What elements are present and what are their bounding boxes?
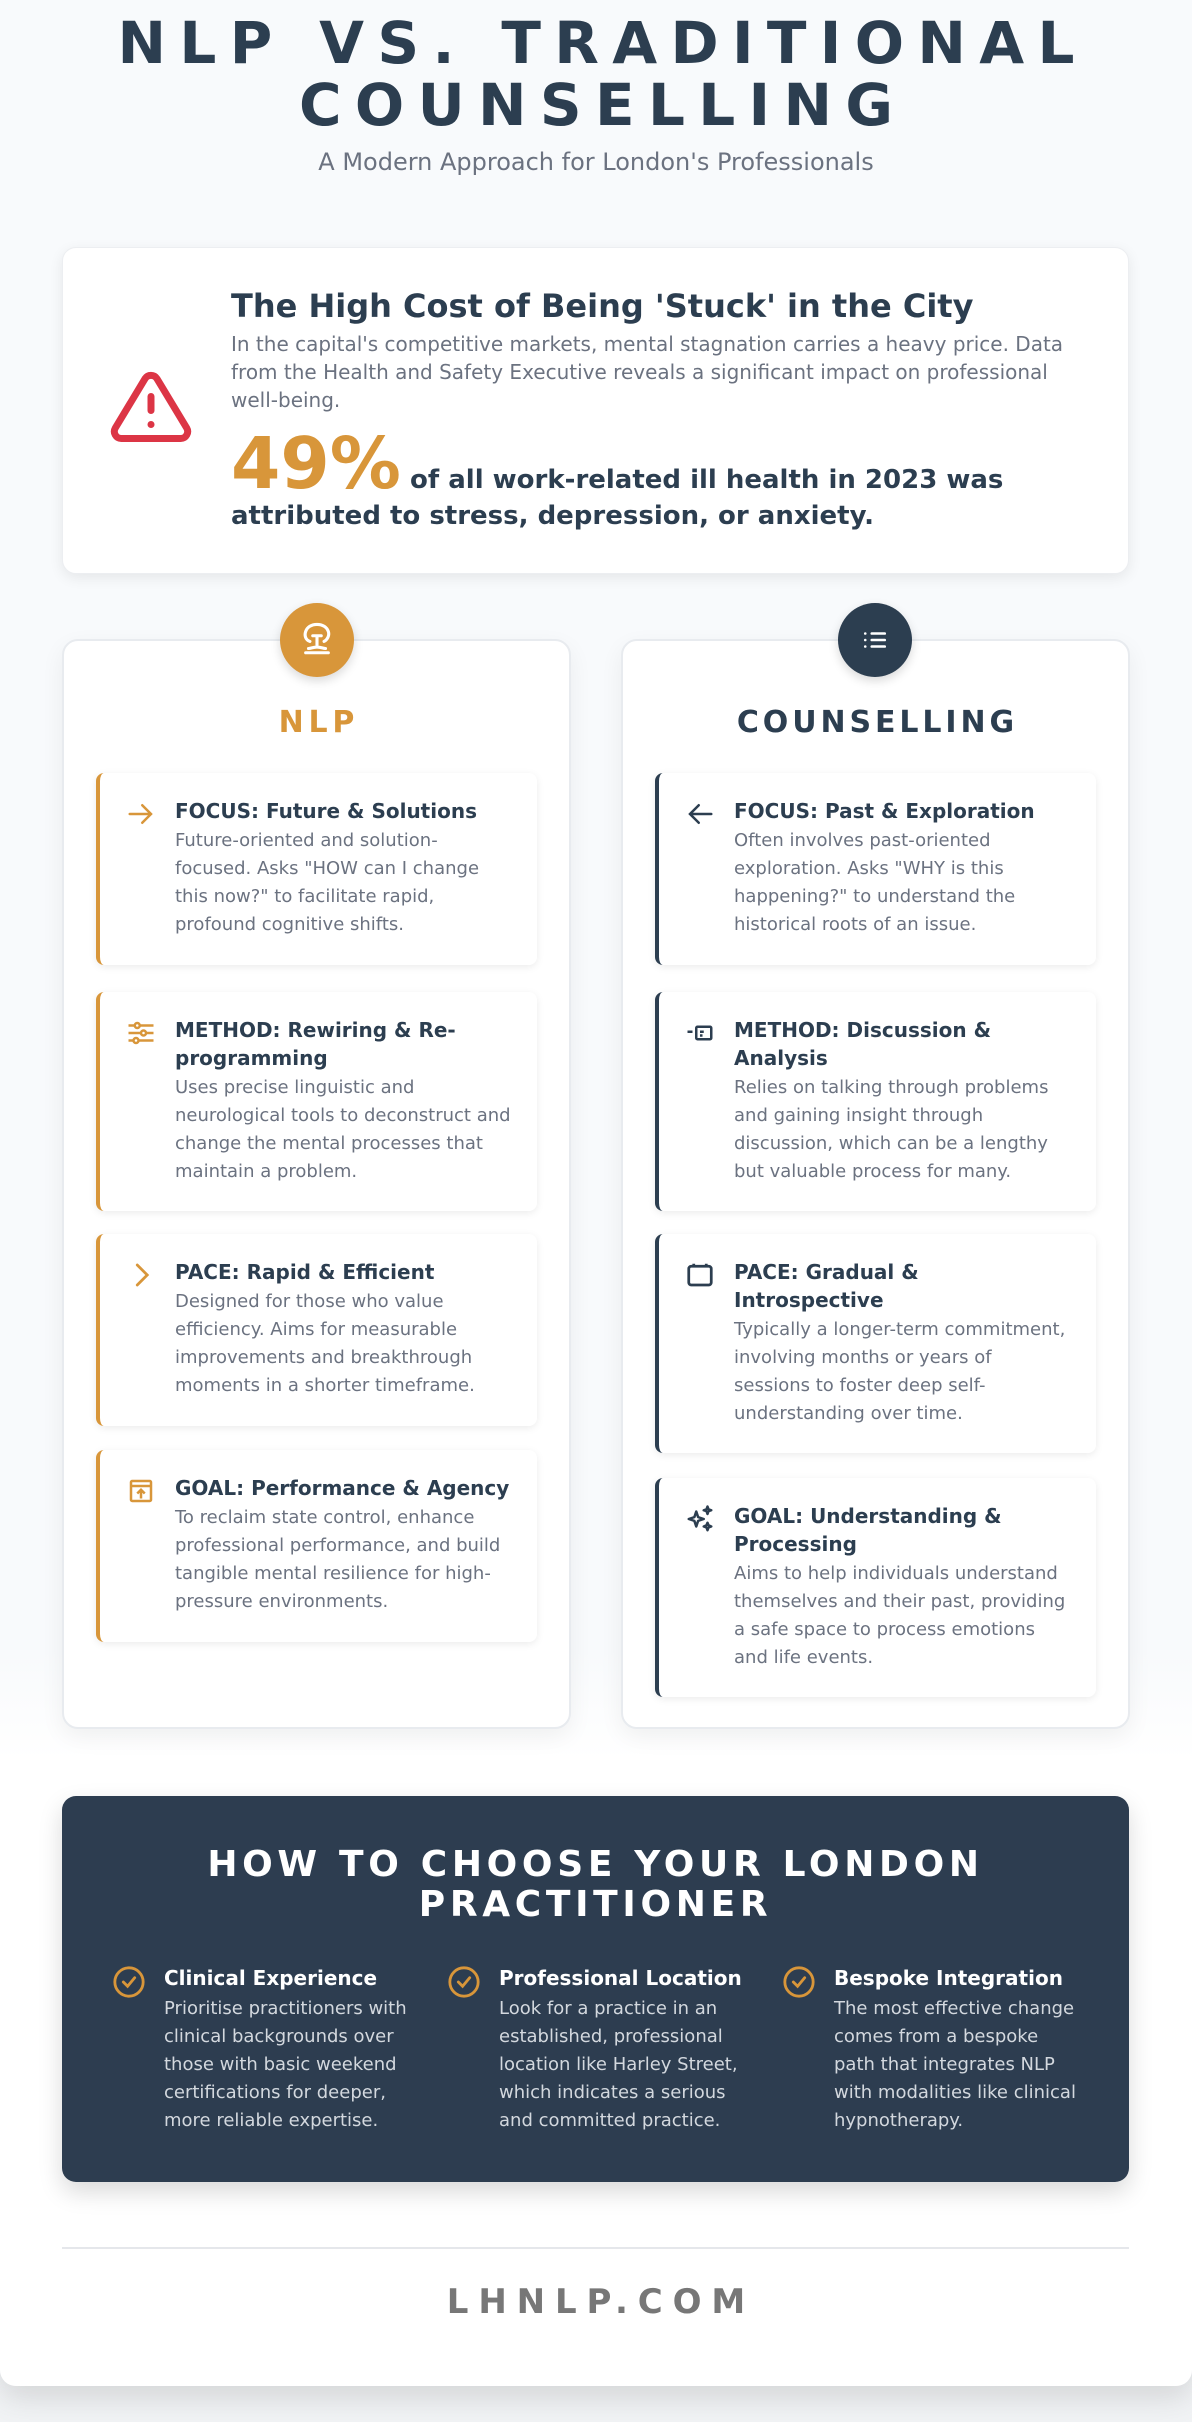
item: goal: To reclaim state control, enhance professional performance, and build tangible mental resilience for high-pressure environments. bbox=[175, 1507, 500, 1612]
panel: how to choose: The most effective change comes from a bespoke path that integrates NLP with modalities like clinical hypnotherapy. bbox=[834, 1998, 1076, 2131]
title: NLP VS. TRADITIONAL bbox=[118, 9, 1088, 77]
panel: how to choose bbox=[62, 1796, 1129, 2182]
footer: website: LHNLP.COM bbox=[447, 2282, 755, 2322]
item: method: METHOD: Discussion & Analysis bbox=[734, 1018, 991, 1070]
item: goal bbox=[96, 1450, 537, 1642]
icon: warning bbox=[110, 372, 192, 442]
title: COUNSELLING bbox=[299, 71, 906, 139]
panel: how to choose: Look for a practice in an established, professional location like Harley Street, which indicates a serious and committed practice. bbox=[499, 1998, 738, 2131]
item: method: METHOD: Rewiring & Re-programming bbox=[175, 1018, 456, 1070]
heading bbox=[207, 1844, 984, 1925]
item: focus: FOCUS: Past & Exploration bbox=[734, 799, 1035, 823]
item: method: Uses precise linguistic and neurological tools to deconstruct and change the mental processes that maintain a problem. bbox=[175, 1077, 511, 1182]
text block: In the capital's competitive markets, mental stagnation carries a heavy price. Data from the Health and Safety Executive reveals a significant impact on professional well-being. bbox=[231, 332, 1063, 412]
item: method: Relies on talking through problems and gaining insight through discussion, which can be a lengthy but valuable process for many. bbox=[734, 1077, 1048, 1182]
stat: 49% of all work-related ill health in 2023 was attributed to stress, depression, or anxiety. bbox=[231, 422, 1003, 531]
item: goal: GOAL: Performance & Agency bbox=[175, 1476, 509, 1500]
item: goal: GOAL: Understanding & Processing bbox=[734, 1504, 1002, 1556]
column title: COUNSELLING bbox=[737, 705, 1018, 740]
item: method bbox=[96, 992, 537, 1211]
tip: bespoke integration bbox=[783, 1966, 1076, 2131]
panel: NLP column bbox=[62, 639, 571, 1729]
tip: clinical experience bbox=[113, 1966, 407, 2131]
panel: Counselling column bbox=[621, 639, 1130, 1729]
heading: HOW TO CHOOSE YOUR LONDON bbox=[207, 1844, 984, 1885]
panel: stat card bbox=[62, 247, 1129, 574]
item: focus: Future-oriented and solution-focused. Asks "HOW can I change this now?" to facilitate rapid, profound cognitive shifts. bbox=[175, 830, 479, 935]
heading: PRACTITIONER bbox=[419, 1884, 772, 1925]
item: focus bbox=[655, 773, 1096, 965]
item: goal bbox=[655, 1478, 1096, 1697]
panel: how to choose: Bespoke Integration bbox=[834, 1966, 1063, 1990]
item: pace: Designed for those who value efficiency. Aims for measurable improvements and breakthrough moments in a shorter timeframe. bbox=[175, 1291, 475, 1396]
subtitle: A Modern Approach for London's Professionals bbox=[318, 148, 874, 176]
item: goal: Aims to help individuals understand themselves and their past, providing a safe space to process emotions and life events. bbox=[734, 1563, 1065, 1668]
panel: how to choose: Prioritise practitioners with clinical backgrounds over those with basic weekend certifications for deeper, more reliable expertise. bbox=[164, 1998, 407, 2131]
item: focus: FOCUS: Future & Solutions bbox=[175, 799, 477, 823]
item: focus bbox=[96, 773, 537, 965]
icon: calendar bbox=[687, 1264, 713, 1286]
panel: how to choose: Clinical Experience bbox=[164, 1966, 377, 1990]
icon: chat bbox=[688, 1026, 712, 1040]
item: pace bbox=[96, 1234, 537, 1426]
heading: The High Cost of Being 'Stuck' in the City bbox=[231, 287, 973, 325]
column title: NLP bbox=[279, 705, 359, 740]
icon: NLP circle bbox=[280, 603, 354, 677]
icon: chevron bbox=[136, 1264, 150, 1286]
icon: sparkles bbox=[688, 1505, 712, 1532]
icon: sliders bbox=[128, 1022, 154, 1044]
panel: how to choose: Professional Location bbox=[499, 1966, 742, 1990]
item: pace: Typically a longer-term commitment, involving months or years of sessions to foster deep self-understanding over time. bbox=[734, 1319, 1065, 1424]
item: pace: PACE: Gradual & Introspective bbox=[734, 1260, 919, 1312]
item: pace: PACE: Rapid & Efficient bbox=[175, 1260, 434, 1284]
item: pace bbox=[655, 1234, 1096, 1453]
tip: professional location bbox=[448, 1966, 742, 2131]
title bbox=[118, 9, 1088, 139]
icon: arrow left bbox=[688, 804, 712, 824]
icon: arrow right bbox=[128, 804, 153, 824]
icon: counselling circle bbox=[838, 603, 912, 677]
item: focus: Often involves past-oriented exploration. Asks "WHY is this happening?" to understand the historical roots of an issue. bbox=[734, 830, 1015, 935]
item: method bbox=[655, 992, 1096, 1211]
icon: upload box bbox=[130, 1480, 152, 1502]
